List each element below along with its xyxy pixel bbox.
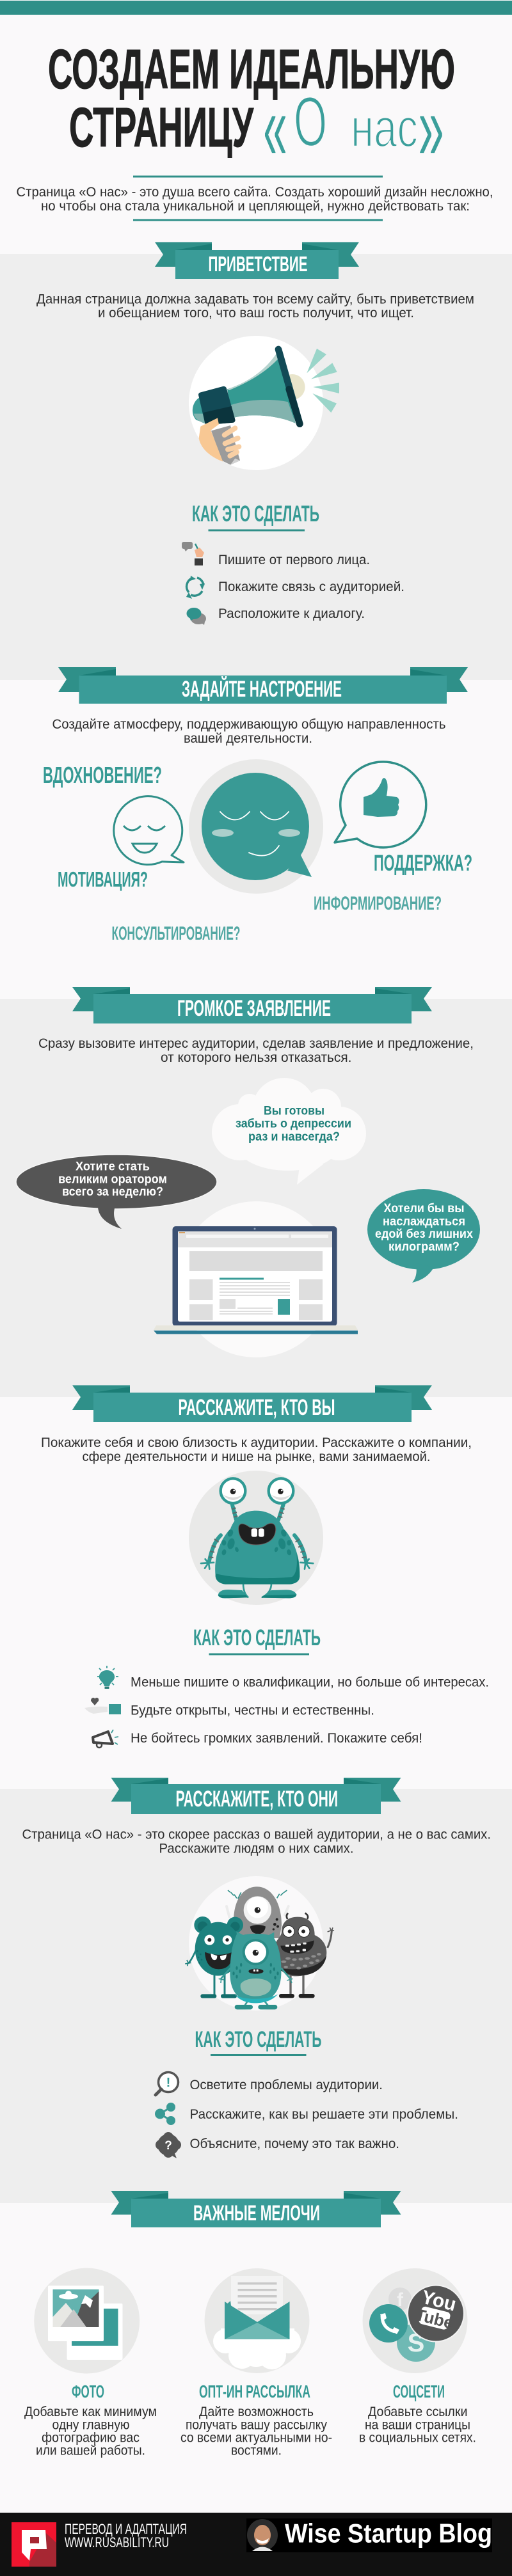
bubble: teal: килограмм? [388, 1240, 460, 1254]
heading: how to 3 [195, 2027, 321, 2056]
text: mood: вашей деятельности. [184, 731, 312, 746]
text: statement [38, 1036, 474, 1065]
icon: thumbs up bubble [335, 762, 426, 848]
panel: opt-in mailing: получать вашу рассылку [186, 2417, 327, 2432]
intro text [17, 184, 493, 214]
text: statement: от которого нельзя отказаться. [161, 1050, 352, 1065]
panel: social networks: СОЦСЕТИ [393, 2382, 445, 2401]
footer credit [65, 2521, 187, 2550]
intro text: но чтобы она стала уникальной и цепляющей, нужно действовать так: [41, 198, 470, 214]
text: mood: Создайте атмосферу, поддерживающую общую направленность [52, 716, 445, 732]
panel: social networks: Добавьте ссылки [368, 2404, 467, 2419]
bubble: cloud: Вы готовы [264, 1104, 324, 1118]
intro text: Страница «О нас» - это душа всего сайта. Создать хороший дизайн несложно, [17, 184, 493, 200]
ribbon: Важные мелочи [111, 2191, 401, 2227]
list: how to 3: Объясните, почему это так важно. [189, 2136, 399, 2151]
ribbon: Расскажите, кто вы: РАССКАЖИТЕ, КТО ВЫ [178, 1395, 335, 1420]
icon: Rusability logo [12, 2522, 56, 2566]
ribbon: Громкое заявление [72, 987, 432, 1023]
title: « [263, 73, 287, 180]
illustration: monsters group [185, 1876, 334, 2011]
ribbon: Расскажите, кто они [111, 1778, 401, 1814]
ribbon: Расскажите, кто вы [72, 1386, 432, 1422]
list: how to 1: Покажите связь с аудиторией. [218, 579, 404, 594]
bubble: cloud: забыть о депрессии [236, 1117, 351, 1131]
icon: question cloud: ? [164, 2139, 172, 2153]
list: how to 2: Будьте открыты, честны и естественны. [131, 1703, 374, 1718]
bubble: cloud: раз и навсегда? [248, 1130, 340, 1144]
icon: share nodes [155, 2103, 175, 2125]
icon: magnifier: ! [166, 2076, 170, 2090]
heading: how to 1 [192, 502, 319, 531]
icon: small megaphone [93, 1730, 118, 1748]
panel: photo: одну главную [52, 2417, 129, 2432]
ribbon: Задайте настроение [58, 667, 468, 704]
ribbon: Задайте настроение: ЗАДАЙТЕ НАСТРОЕНИЕ [182, 676, 342, 702]
list: how to 1: Расположите к диалогу. [218, 606, 365, 621]
icon: open hand with heart [84, 1698, 121, 1714]
title: О [292, 82, 329, 162]
panel: social networks: в социальных сетях. [359, 2430, 476, 2445]
list: how to 2: Не бойтесь громких заявлений. Покажите себя! [131, 1730, 422, 1746]
bubble: dark [16, 1155, 217, 1229]
icon: laughing outline bubble [114, 796, 184, 865]
footer credit: ПЕРЕВОД И АДАПТАЦИЯ [65, 2521, 187, 2537]
bubble: teal: наслаждаться [383, 1215, 465, 1228]
panel: photo: Добавьте как минимум [24, 2404, 157, 2419]
icon: social badges: f [397, 2289, 404, 2311]
panel: photo: фотографию вас [42, 2430, 140, 2445]
bubble: teal: Хотели бы вы [384, 1202, 465, 1215]
text: who they are: Расскажите людям о них самих. [159, 1841, 353, 1856]
text: who you are: Покажите себя и свою близость к аудитории. Расскажите о компании, [41, 1435, 472, 1450]
list: how to 1: Пишите от первого лица. [218, 552, 370, 567]
text: statement: Сразу вызовите интерес аудитории, сделав заявление и предложение, [38, 1036, 474, 1051]
ribbon: Важные мелочи: ВАЖНЫЕ МЕЛОЧИ [193, 2201, 320, 2225]
icon: question cloud [156, 2132, 181, 2158]
laptop [154, 1226, 358, 1334]
panel: opt-in mailing: со всеми актуальными но- [180, 2430, 332, 2445]
text: welcome [36, 292, 474, 320]
icon: megaphone [189, 336, 339, 470]
heading: how to 1: КАК ЭТО СДЕЛАТЬ [192, 502, 319, 526]
ribbon: Громкое заявление: ГРОМКОЕ ЗАЯВЛЕНИЕ [177, 996, 331, 1021]
ribbon: Приветствие [155, 242, 359, 279]
icon: chat bubbles [187, 608, 206, 625]
list: how to 2: Меньше пишите о квалификации, но больше об интересах. [131, 1675, 489, 1690]
bubble: teal [367, 1189, 480, 1283]
list: how to 3: Расскажите, как вы решаете эти проблемы. [189, 2106, 458, 2122]
panel: social networks: на ваши страницы [365, 2417, 470, 2432]
title: СТРАНИЦУ [69, 97, 254, 159]
icon: central smiling bubble [189, 759, 323, 894]
icon: social badges [362, 2268, 467, 2373]
panel: photo [24, 2268, 157, 2458]
bubble: dark: великим оратором [58, 1173, 167, 1186]
text: who they are [22, 1827, 491, 1856]
top bar [0, 1, 512, 15]
bubble: teal: едой без лишних [375, 1228, 473, 1241]
panel: opt-in mailing: востями. [231, 2442, 282, 2458]
icon: cycle arrows [186, 576, 205, 599]
laptop backdrop [178, 1201, 334, 1357]
bubble: dark: Хотите стать [76, 1160, 150, 1173]
bubble: dark: всего за неделю? [62, 1185, 163, 1199]
mood labels: ВДОХНОВЕНИЕ? [43, 762, 162, 788]
icon: photos [34, 2268, 140, 2373]
icon: social badges: You [419, 2286, 458, 2316]
text: who they are: Страница «О нас» - это скорее рассказ о вашей аудитории, а не о вас самих. [22, 1827, 491, 1842]
text: who you are: сфере деятельности и нише на рынке, вами занимаемой. [82, 1449, 430, 1464]
panel: photo: ФОТО [72, 2382, 104, 2401]
title: нас [351, 98, 418, 159]
mood labels: МОТИВАЦИЯ? [58, 867, 148, 891]
list: how to 1 [182, 542, 404, 625]
bubble: cloud [212, 1078, 366, 1185]
title: » [418, 73, 444, 180]
illustration: monster [189, 1471, 323, 1605]
panel: opt-in mailing: Дайте возможность [199, 2404, 314, 2419]
text: mood [52, 716, 445, 746]
mood labels [43, 762, 472, 944]
text: welcome: Данная страница должна задавать тон всему сайту, быть приветствием [36, 292, 474, 307]
ribbon: Приветствие: ПРИВЕТСТВИЕ [209, 252, 307, 276]
panel: opt-in mailing [180, 2268, 332, 2458]
list: how to 2 [84, 1666, 489, 1748]
icon: magnifier [156, 2073, 178, 2095]
icon: writing hand [182, 542, 204, 565]
blog banner [246, 2518, 492, 2552]
footer credit: WWW.RUSABILITY.RU [65, 2534, 169, 2550]
heading: how to 2: КАК ЭТО СДЕЛАТЬ [193, 1625, 321, 1650]
footer [0, 2513, 512, 2576]
icon: light bulb [97, 1666, 118, 1689]
blog banner: Wise Startup Blog [285, 2518, 492, 2548]
panel: photo: или вашей работы. [36, 2442, 145, 2458]
icon: social badges: Tube [413, 2305, 456, 2333]
heading: how to 2 [193, 1625, 321, 1655]
icon: envelope on cloud [205, 2268, 310, 2373]
text: who you are [41, 1435, 472, 1464]
list: how to 3: Осветите проблемы аудитории. [189, 2077, 383, 2092]
panel: social networks [359, 2268, 476, 2445]
list: how to 3 [155, 2073, 458, 2158]
heading: how to 3: КАК ЭТО СДЕЛАТЬ [195, 2027, 321, 2052]
icon: social badges: S [408, 2329, 424, 2357]
mood labels: КОНСУЛЬТИРОВАНИЕ? [111, 923, 241, 944]
panel: opt-in mailing: ОПТ-ИН РАССЫЛКА [199, 2382, 310, 2401]
title [48, 38, 455, 180]
ribbon: Расскажите, кто они: РАССКАЖИТЕ, КТО ОНИ [175, 1787, 338, 1812]
text: welcome: и обещанием того, что ваш гость получит, что ищет. [98, 305, 414, 320]
